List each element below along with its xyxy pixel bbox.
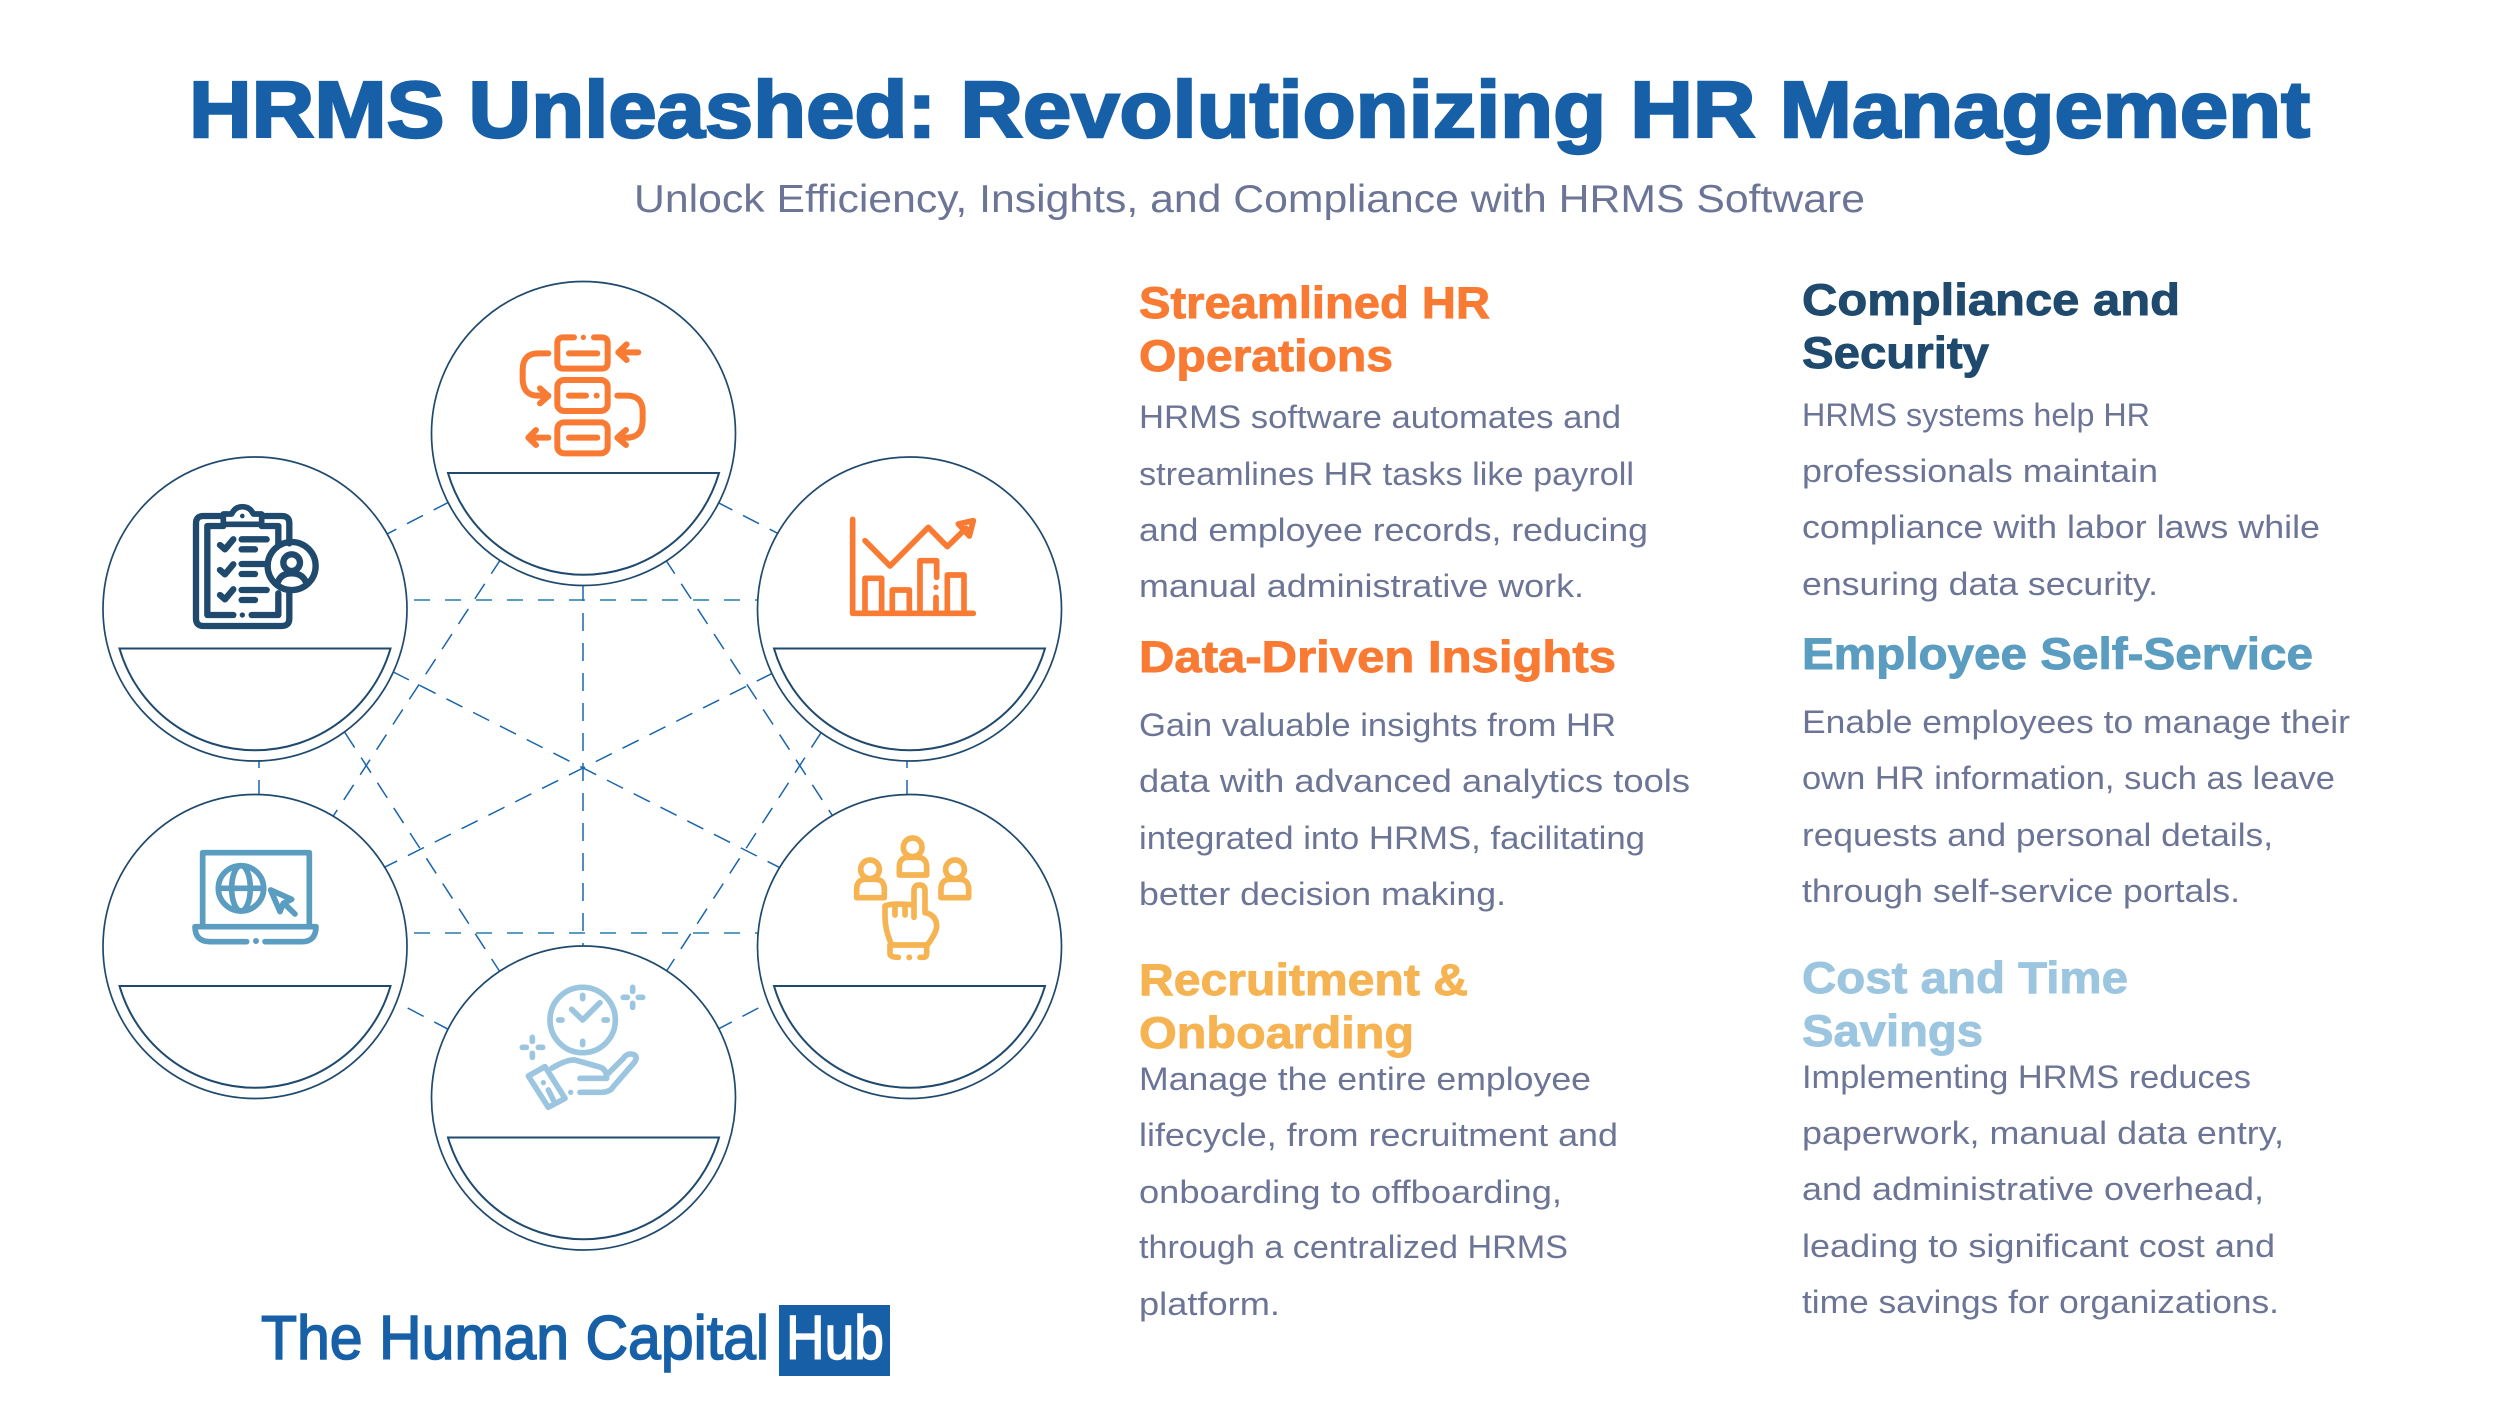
panel: Cost and Time Savings: and administrative overhead,	[1802, 1171, 2264, 1207]
network of dashed connector lines	[259, 433, 907, 1100]
panel: Cost and Time Savings: Savings	[1802, 1007, 1983, 1056]
node circle: top	[432, 282, 736, 586]
node circle: bottom	[432, 946, 736, 1250]
panel: Cost and Time Savings: paperwork, manual data entry,	[1802, 1115, 2284, 1151]
panel: Recruitment and Onboarding: through a centralized HRMS	[1139, 1229, 1568, 1265]
panel: Data-Driven Insights: Data-Driven Insights	[1139, 633, 1616, 682]
panel: Cost and Time Savings: leading to significant cost and	[1802, 1228, 2275, 1264]
panel: Employee Self-Service: through self-service portals.	[1802, 873, 2240, 909]
panel: Streamlined HR Operations: and employee records, reducing	[1139, 512, 1648, 548]
panel: Compliance and Security: compliance with labor laws while	[1802, 509, 2320, 545]
panel: Compliance and Security	[1802, 276, 2320, 602]
panel: Employee Self-Service: own HR information, such as leave	[1802, 760, 2335, 796]
panel: Recruitment and Onboarding: Onboarding	[1139, 1009, 1414, 1058]
icon: growth chart	[853, 519, 973, 613]
panel: Data-Driven Insights: better decision making.	[1139, 876, 1506, 912]
panel: Data-Driven Insights: integrated into HRMS, facilitating	[1139, 820, 1645, 856]
panel: Recruitment and Onboarding: lifecycle, from recruitment and	[1139, 1117, 1618, 1153]
panel: Cost and Time Savings	[1802, 954, 2284, 1320]
panel: Recruitment and Onboarding: platform.	[1139, 1286, 1280, 1322]
panel: Compliance and Security: ensuring data security.	[1802, 566, 2158, 602]
panel: Streamlined HR Operations: HRMS software automates and	[1139, 399, 1621, 435]
panel: Streamlined HR Operations	[1139, 279, 1648, 604]
icon: laptop with globe	[195, 853, 316, 944]
panel: Employee Self-Service: requests and personal details,	[1802, 817, 2273, 853]
panel: Recruitment and Onboarding: Recruitment &	[1139, 956, 1468, 1005]
panel: Employee Self-Service: Employee Self-Service	[1802, 630, 2313, 679]
panel: Streamlined HR Operations: Streamlined HR	[1139, 279, 1490, 328]
panel: Cost and Time Savings: Cost and Time	[1802, 954, 2128, 1003]
icon: workflow boxes	[523, 335, 643, 453]
panel: Streamlined HR Operations: manual administrative work.	[1139, 568, 1584, 604]
logo: The Human Capital	[261, 1304, 769, 1373]
node circle: lower left	[103, 794, 407, 1098]
panel: Employee Self-Service	[1802, 630, 2350, 909]
panel: Data-Driven Insights	[1139, 633, 1690, 912]
panel: Cost and Time Savings: time savings for organizations.	[1802, 1284, 2279, 1320]
node circle: upper right	[758, 457, 1062, 761]
panel: Data-Driven Insights: data with advanced analytics tools	[1139, 763, 1690, 799]
title: HRMS Unleashed: Revolutionizing HR Management	[189, 65, 2310, 154]
panel: Recruitment and Onboarding	[1139, 956, 1618, 1322]
subtitle: Unlock Efficiency, Insights, and Compliance with HRMS Software	[634, 178, 1865, 221]
node circle: lower right	[758, 794, 1062, 1098]
panel: Streamlined HR Operations: streamlines HR tasks like payroll	[1139, 456, 1634, 492]
icon: clipboard with person	[196, 507, 316, 626]
panel: Cost and Time Savings: Implementing HRMS reduces	[1802, 1059, 2251, 1095]
panel: Streamlined HR Operations: Operations	[1139, 332, 1393, 381]
icon: clock on open hand	[522, 987, 643, 1107]
node circle: upper left	[103, 457, 407, 761]
panel: Compliance and Security: Compliance and	[1802, 276, 2180, 325]
panel: Employee Self-Service: Enable employees to manage their	[1802, 704, 2350, 740]
panel: Data-Driven Insights: Gain valuable insights from HR	[1139, 707, 1616, 743]
panel: Compliance and Security: professionals maintain	[1802, 453, 2158, 489]
panel: Recruitment and Onboarding: onboarding to offboarding,	[1139, 1174, 1562, 1210]
icon: people and pointing hand	[857, 838, 969, 960]
logo: Hub	[786, 1304, 884, 1373]
panel: Compliance and Security: HRMS systems help HR	[1802, 397, 2150, 433]
panel: Compliance and Security: Security	[1802, 329, 1989, 378]
panel: Recruitment and Onboarding: Manage the entire employee	[1139, 1061, 1591, 1097]
